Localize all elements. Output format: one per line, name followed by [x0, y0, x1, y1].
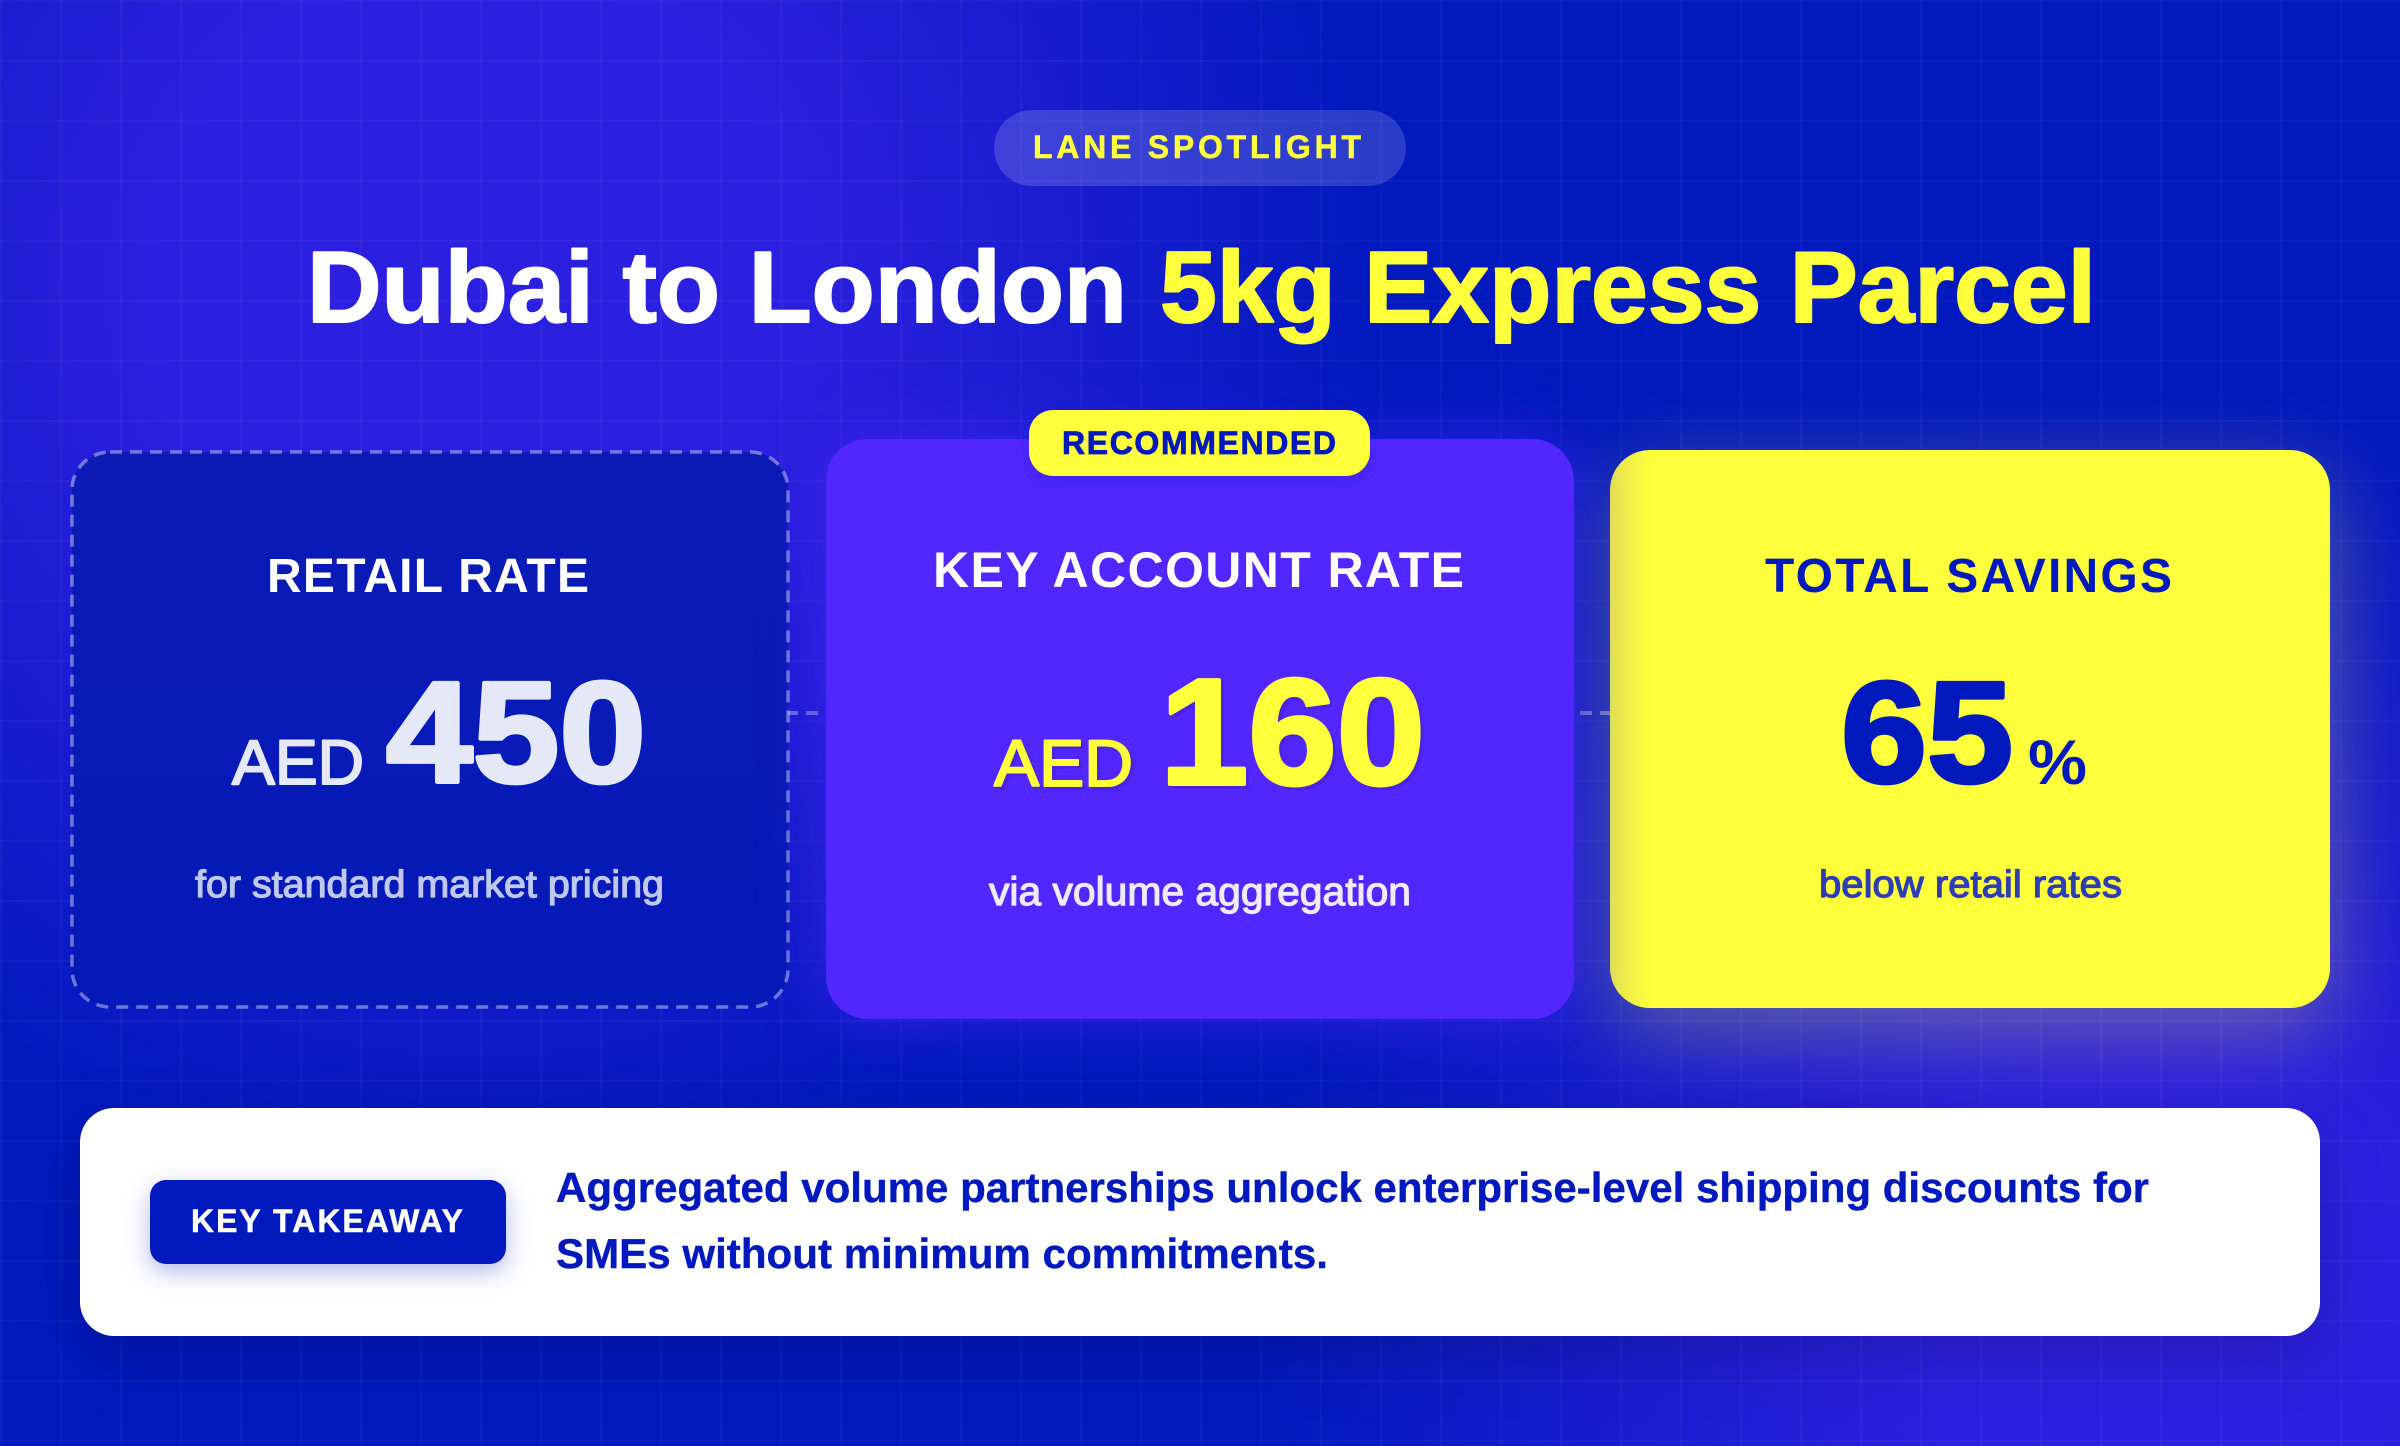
- title: Dubai to London: [307, 232, 1127, 344]
- connector: retail to key account: [786, 711, 826, 715]
- retail heading: RETAIL RATE: [267, 550, 589, 603]
- percent sign: %: [2028, 728, 2087, 798]
- key account note: via volume aggregation: [989, 870, 1411, 914]
- panel: total savings: [1610, 450, 2330, 1008]
- retail currency: AED: [232, 728, 364, 798]
- panel: key account rate: [826, 410, 1574, 1019]
- savings figure: 65: [1841, 652, 2013, 813]
- savings heading: TOTAL SAVINGS: [1765, 550, 2172, 603]
- panel: key takeaway: [80, 1108, 2320, 1336]
- connector: key account to savings: [1580, 711, 1610, 715]
- takeaway text: SMEs without minimum commitments.: [556, 1230, 1328, 1277]
- panel: retail rate: [72, 452, 788, 1007]
- title: [307, 232, 2096, 344]
- savings note: below retail rates: [1819, 864, 2122, 906]
- key account currency: AED: [994, 726, 1133, 800]
- title: 5kg Express Parcel: [1160, 232, 2096, 344]
- retail price: 450: [386, 652, 646, 813]
- lane spotlight pill: [994, 110, 1406, 186]
- recommended badge: RECOMMENDED: [1062, 425, 1336, 461]
- lane spotlight pill: LANE SPOTLIGHT: [1033, 129, 1361, 165]
- recommended badge: [1029, 410, 1370, 476]
- key account price: 160: [1160, 647, 1425, 816]
- takeaway text: Aggregated volume partnerships unlock enterprise-level shipping discounts for: [556, 1164, 2149, 1211]
- retail note: for standard market pricing: [195, 864, 664, 906]
- key account heading: KEY ACCOUNT RATE: [933, 542, 1464, 598]
- key takeaway badge: [150, 1180, 506, 1264]
- takeaway text: [556, 1164, 2149, 1277]
- key takeaway badge: KEY TAKEAWAY: [191, 1203, 463, 1239]
